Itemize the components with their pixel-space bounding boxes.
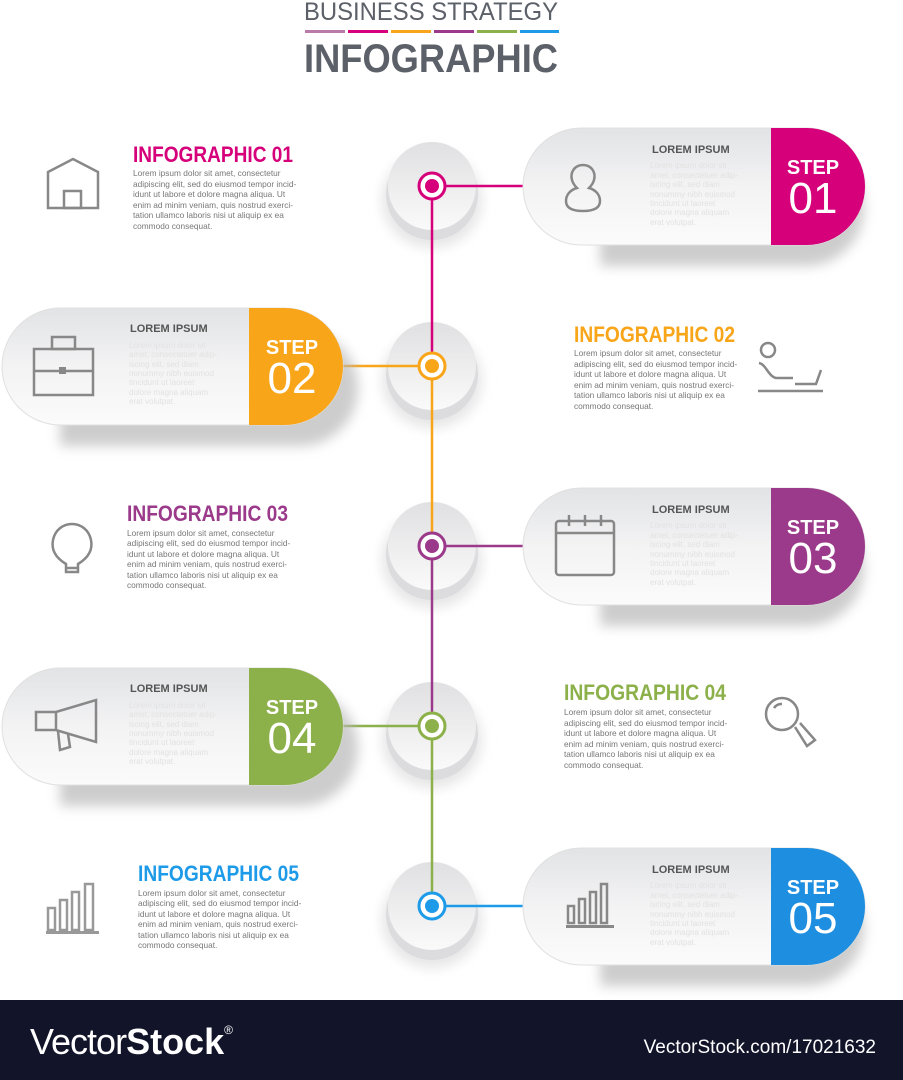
panel: step 04: tincidunt ut laoreet — [129, 738, 195, 747]
panel: step 01: amet, consectetuer adip- — [650, 171, 738, 180]
icon: house — [48, 159, 98, 208]
panel: step 02: iscing elit, sed diam — [129, 360, 199, 369]
panel: step 02: nonummy nibh euismod — [129, 369, 214, 378]
text block: infographic 04: Lorem ipsum dolor sit amet, consectetur — [564, 707, 712, 717]
text block: infographic 05: INFOGRAPHIC 05 — [138, 861, 299, 886]
panel: step 03: 03 — [789, 534, 837, 583]
panel: step 05: LOREM IPSUM — [652, 864, 730, 876]
panel: step 01: erat volutpat. — [650, 218, 696, 227]
text block: infographic 03 — [127, 501, 290, 590]
panel: step 04 — [2, 668, 358, 806]
text block: infographic 05: commodo consequat. — [138, 940, 217, 950]
panel: step 03: erat volutpat. — [650, 578, 696, 587]
panel: step 04: LOREM IPSUM — [130, 683, 208, 695]
panel: step 03: Lorem ipsum dolor sit — [650, 521, 727, 530]
text block: infographic 03: tation ullamco laboris nisi ut aliquip ex ea — [127, 570, 278, 580]
panel: step 03: dolore magna aliquam — [650, 568, 729, 577]
text block: infographic 03: INFOGRAPHIC 03 — [127, 501, 288, 526]
text block: infographic 05: adipiscing elit, sed do eiusmod tempor incid- — [138, 898, 301, 908]
panel: step 04: dolore magna aliquam — [129, 748, 208, 757]
panel: step 01: tincidunt ut laoreet — [650, 199, 716, 208]
text block: infographic 02 — [574, 322, 737, 411]
text block: infographic 05: enim ad minim veniam, quis nostrud exerci- — [138, 919, 298, 929]
footer: VectorStock.com/17021632 — [644, 1037, 876, 1058]
text block: infographic 02: idunt ut labore et dolore magna aliqua. Ut — [574, 369, 727, 379]
panel: step 01: 01 — [789, 174, 837, 223]
icon: bar chart — [46, 884, 99, 934]
icon: lightbulb — [53, 524, 91, 572]
text block: infographic 04: adipiscing elit, sed do eiusmod tempor incid- — [564, 718, 727, 728]
panel: step 03: iscing elit, sed diam — [650, 540, 720, 549]
panel: step 03: tincidunt ut laoreet — [650, 559, 716, 568]
panel: step 05: nonummy nibh euismod — [650, 910, 735, 919]
panel: step 02: dolore magna aliquam — [129, 388, 208, 397]
panel: step 05: 05 — [789, 894, 837, 943]
panel: step 01: dolore magna aliquam — [650, 208, 729, 217]
footer — [0, 1000, 903, 1080]
panel: step 04: erat volutpat. — [129, 757, 175, 766]
panel: step 02 — [2, 308, 358, 446]
panel: step 05: Lorem ipsum dolor sit — [650, 881, 727, 890]
text block: infographic 01: adipiscing elit, sed do eiusmod tempor incid- — [133, 179, 296, 189]
panel: step 05 — [523, 848, 865, 986]
text block: infographic 03: adipiscing elit, sed do eiusmod tempor incid- — [127, 538, 290, 548]
panel: step 02: amet, consectetuer adip- — [129, 350, 217, 359]
icon: person at laptop — [758, 343, 823, 391]
text block: infographic 01: enim ad minim veniam, quis nostrud exerci- — [133, 200, 293, 210]
panel: step 02: erat volutpat. — [129, 397, 175, 406]
panel: step 02: STEP — [266, 337, 318, 359]
text block: infographic 02: adipiscing elit, sed do eiusmod tempor incid- — [574, 359, 737, 369]
panel: step 02: LOREM IPSUM — [130, 323, 208, 335]
discs — [382, 142, 482, 968]
text block: infographic 03: idunt ut labore et dolore magna aliqua. Ut — [127, 549, 280, 559]
panel: step 02: tincidunt ut laoreet — [129, 378, 195, 387]
panel: step 05: STEP — [787, 877, 839, 899]
text block: infographic 05: idunt ut labore et dolore magna aliqua. Ut — [138, 909, 291, 919]
text block: infographic 04: tation ullamco laboris nisi ut aliquip ex ea — [564, 749, 715, 759]
panel: step 01: iscing elit, sed diam — [650, 180, 720, 189]
text block: infographic 01: tation ullamco laboris nisi ut aliquip ex ea — [133, 210, 284, 220]
text block: infographic 04: commodo consequat. — [564, 760, 643, 770]
panel: step 01 — [523, 128, 865, 266]
panel: step 03: LOREM IPSUM — [652, 504, 730, 516]
text block: infographic 02: enim ad minim veniam, quis nostrud exerci- — [574, 380, 734, 390]
icon: magnifier — [766, 698, 815, 746]
text block: infographic 03: commodo consequat. — [127, 580, 206, 590]
title — [304, 0, 559, 81]
panel: step 04: 04 — [268, 714, 316, 763]
title: INFOGRAPHIC — [304, 37, 558, 81]
panel: step 01: LOREM IPSUM — [652, 144, 730, 156]
panel: step 03: amet, consectetuer adip- — [650, 531, 738, 540]
panel: step 02: Lorem ipsum dolor sit — [129, 341, 206, 350]
text block: infographic 05: tation ullamco laboris nisi ut aliquip ex ea — [138, 930, 289, 940]
panel: step 04: iscing elit, sed diam — [129, 720, 199, 729]
text block: infographic 04: idunt ut labore et dolore magna aliqua. Ut — [564, 728, 717, 738]
timeline nodes — [419, 173, 445, 919]
timeline lines — [340, 186, 525, 906]
text block: infographic 02: Lorem ipsum dolor sit amet, consectetur — [574, 348, 722, 358]
panel: step 01: Lorem ipsum dolor sit — [650, 161, 727, 170]
text block: infographic 04 — [564, 680, 727, 770]
text block: infographic 05 — [138, 861, 301, 950]
text block: infographic 04: INFOGRAPHIC 04 — [564, 680, 727, 705]
text block: infographic 01: idunt ut labore et dolore magna aliqua. Ut — [133, 189, 286, 199]
panel: step 04: nonummy nibh euismod — [129, 729, 214, 738]
panel: step 05: dolore magna aliquam — [650, 928, 729, 937]
text block: infographic 02: tation ullamco laboris nisi ut aliquip ex ea — [574, 390, 725, 400]
footer: ® — [224, 1023, 233, 1037]
text block: infographic 02: INFOGRAPHIC 02 — [574, 322, 735, 347]
panel: step 05: tincidunt ut laoreet — [650, 919, 716, 928]
panel: step 05: iscing elit, sed diam — [650, 900, 720, 909]
panel: step 03: STEP — [787, 517, 839, 539]
panel: step 04: Lorem ipsum dolor sit — [129, 701, 206, 710]
panel: step 02: 02 — [268, 354, 316, 403]
text block: infographic 03: enim ad minim veniam, quis nostrud exerci- — [127, 559, 287, 569]
panel: step 01: nonummy nibh euismod — [650, 190, 735, 199]
panel: step 01: STEP — [787, 157, 839, 179]
text block: infographic 01: commodo consequat. — [133, 221, 212, 231]
panel: step 04: amet, consectetuer adip- — [129, 710, 217, 719]
panel: step 05: amet, consectetuer adip- — [650, 891, 738, 900]
footer: VectorStock — [30, 1021, 224, 1062]
text block: infographic 01 — [133, 142, 296, 231]
text block: infographic 01: Lorem ipsum dolor sit amet, consectetur — [133, 168, 281, 178]
panel: step 03: nonummy nibh euismod — [650, 550, 735, 559]
text block: infographic 03: Lorem ipsum dolor sit amet, consectetur — [127, 528, 275, 538]
text block: infographic 01: INFOGRAPHIC 01 — [133, 142, 293, 167]
text block: infographic 05: Lorem ipsum dolor sit amet, consectetur — [138, 888, 286, 898]
panel: step 03 — [523, 488, 865, 626]
panel: step 04: STEP — [266, 697, 318, 719]
text block: infographic 04: enim ad minim veniam, quis nostrud exerci- — [564, 739, 724, 749]
panel: step 05: erat volutpat. — [650, 938, 696, 947]
text block: infographic 02: commodo consequat. — [574, 401, 653, 411]
